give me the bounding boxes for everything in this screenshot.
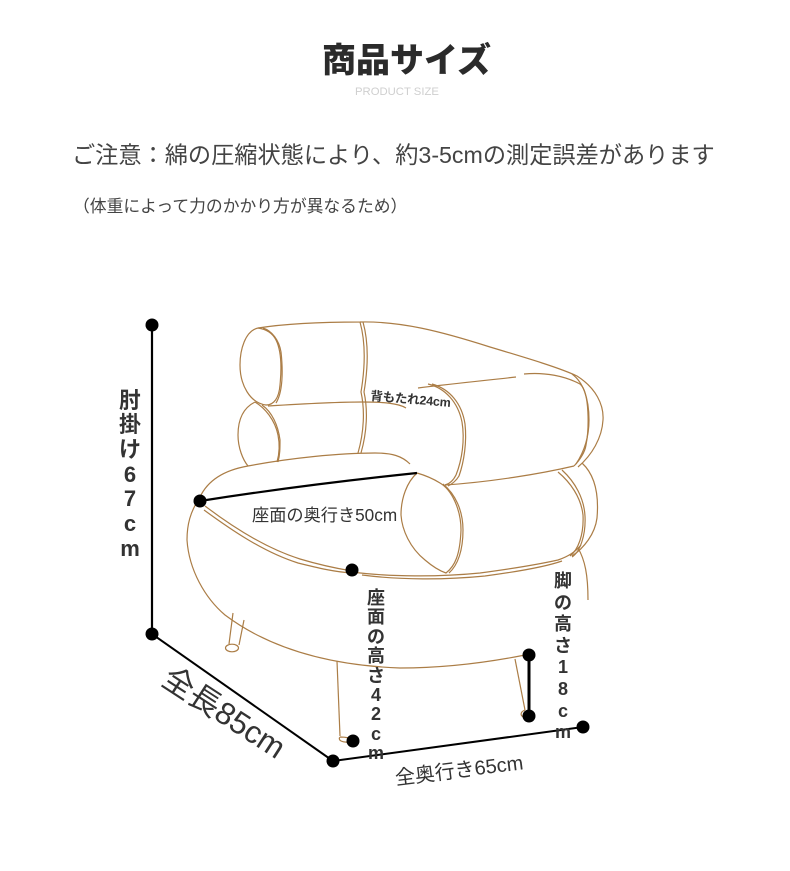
label: seat height: m bbox=[368, 743, 384, 763]
label: leg height: 高 bbox=[554, 614, 572, 634]
label: seat height: 座 bbox=[367, 588, 385, 608]
notice note: （体重によって力のかかり方が異なるため） bbox=[73, 197, 407, 216]
label: leg height: m bbox=[555, 722, 571, 742]
label: total length: 全長85cm bbox=[156, 660, 292, 765]
label: armrest height: 7 bbox=[124, 486, 136, 511]
label: leg height: c bbox=[558, 701, 568, 721]
subtitle: PRODUCT SIZE bbox=[355, 86, 439, 98]
label: armrest height bbox=[119, 388, 141, 561]
chair outline bbox=[187, 322, 603, 742]
label: seat depth: 座面の奥行き50cm bbox=[252, 505, 397, 525]
dimension lines bbox=[152, 325, 583, 761]
label: armrest height: 肘 bbox=[119, 388, 141, 412]
label: armrest height: m bbox=[120, 536, 140, 561]
label: leg height: 8 bbox=[558, 679, 568, 699]
label: seat height: 高 bbox=[367, 646, 385, 666]
label: leg height: の bbox=[554, 593, 572, 613]
label: seat height: 4 bbox=[371, 685, 381, 705]
label: seat height: 2 bbox=[371, 704, 381, 724]
label: leg height: 1 bbox=[558, 657, 568, 677]
label: armrest height: 6 bbox=[124, 462, 136, 487]
label: seat height: の bbox=[367, 627, 385, 647]
label: seat height: c bbox=[371, 724, 381, 744]
title: 商品サイズ bbox=[322, 42, 491, 80]
label: leg height: 脚 bbox=[554, 571, 572, 591]
label: leg height bbox=[554, 571, 572, 742]
measurement points bbox=[146, 318, 590, 768]
notice text: ご注意：綿の圧縮状態により、約3-5cmの測定誤差があります bbox=[72, 142, 715, 168]
label: seat height bbox=[367, 588, 385, 763]
label: armrest height: 掛 bbox=[119, 412, 141, 437]
label: armrest height: c bbox=[124, 511, 136, 536]
label: leg height: さ bbox=[554, 636, 572, 656]
label: total depth: 全奥行き65cm bbox=[394, 752, 525, 790]
label: armrest height: け bbox=[119, 437, 141, 462]
label: backrest: 背もたれ24cm bbox=[370, 389, 451, 410]
label: seat height: 面 bbox=[367, 607, 385, 627]
label: seat height: さ bbox=[367, 666, 385, 686]
